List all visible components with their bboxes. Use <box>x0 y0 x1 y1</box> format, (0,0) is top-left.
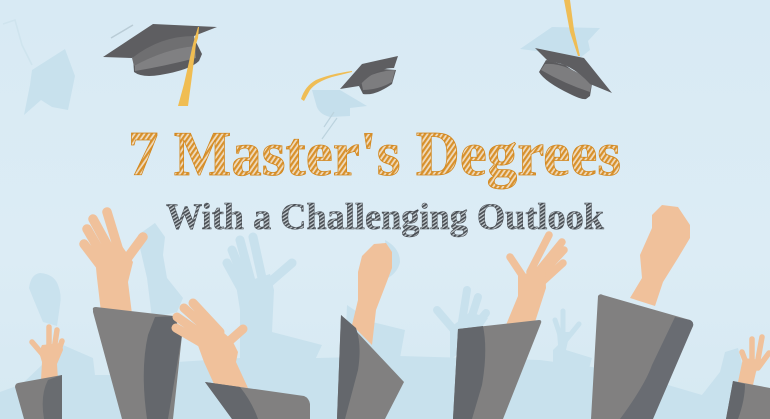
graduation cap: small centre <box>301 56 398 101</box>
graduation cap: large left <box>103 24 217 106</box>
tassel <box>301 71 352 101</box>
silhouette hand behind large left hand <box>138 223 183 318</box>
graduation cap: right with hanging tassel <box>520 0 612 99</box>
tassel <box>178 27 199 106</box>
background crowd silhouettes <box>0 223 770 419</box>
silhouette hand centre left <box>227 237 322 360</box>
tassel <box>564 0 580 56</box>
hand and sleeve: right fist <box>591 205 693 419</box>
subtitle: With a Challenging Outlook <box>166 197 604 238</box>
hand and sleeve: large left <box>84 212 182 419</box>
silhouette hand far left <box>29 273 61 326</box>
hand and sleeve: centre left <box>176 303 310 419</box>
title: 7 Master's Degrees <box>128 118 621 189</box>
silhouette hand behind centre hand <box>346 240 405 358</box>
silhouette hand far right <box>702 348 745 395</box>
faded cap <box>520 27 600 58</box>
hand and sleeve: centre <box>337 243 404 419</box>
silhouette hand centre right <box>437 290 488 360</box>
hand and sleeve: centre right <box>453 235 564 419</box>
silhouette hand right <box>553 311 592 372</box>
hand and sleeve: far right <box>726 337 770 419</box>
faded cap top left <box>3 20 75 115</box>
faded cap behind small cap <box>312 90 367 139</box>
hand and sleeve: far left <box>15 327 63 419</box>
